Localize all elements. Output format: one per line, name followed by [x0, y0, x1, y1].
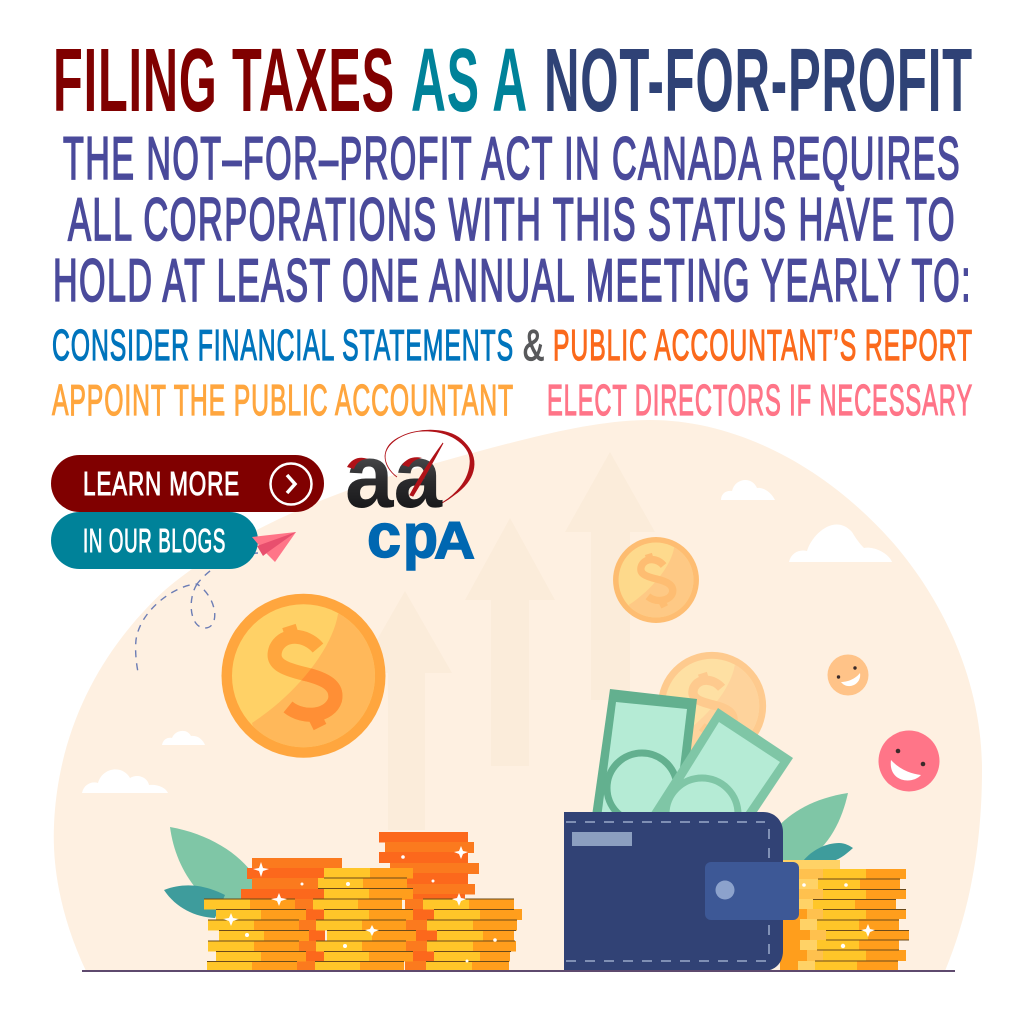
logo slash	[410, 443, 443, 496]
column 3	[423, 899, 522, 972]
requirement: appoint accountant: APPOINT THE PUBLIC ACCOUNTANT	[52, 376, 514, 425]
sparkles	[223, 846, 497, 962]
column 2	[313, 899, 416, 972]
orange stack back right	[379, 832, 479, 900]
ampersand: &	[523, 321, 545, 370]
wallet tag	[572, 832, 632, 846]
button label: IN OUR BLOGS	[83, 522, 226, 559]
coin: behind wallet	[658, 652, 766, 760]
title accent: AS A	[411, 31, 528, 131]
logo cpa: c	[367, 502, 401, 571]
filler orange between stacks	[295, 899, 438, 971]
button: in our blogs	[51, 512, 258, 569]
cloud top small	[721, 480, 775, 500]
yellow stack middle top	[318, 868, 413, 900]
cloud top large	[789, 524, 892, 562]
logo swoosh	[385, 430, 474, 505]
button label: LEARN MORE	[83, 465, 240, 502]
dashed flight path	[136, 553, 258, 672]
cloud left large	[82, 769, 168, 793]
logo accents	[347, 457, 422, 469]
coin: large	[222, 594, 386, 758]
coin stacks left	[204, 832, 522, 972]
arrow icon	[270, 464, 312, 504]
smiley: orange	[828, 654, 868, 696]
background blob	[54, 420, 982, 971]
icon: paper plane	[252, 532, 296, 562]
logo cpa: p	[403, 502, 438, 571]
arrow 3	[565, 452, 655, 700]
arrow 2	[465, 518, 555, 766]
clasp button	[716, 880, 734, 900]
wallet stitching	[566, 822, 769, 961]
wallet	[564, 812, 799, 971]
title: FILING TAXES	[53, 31, 395, 131]
growth arrows	[358, 452, 655, 830]
coin: upper	[613, 537, 699, 623]
logo: aa cpa	[345, 427, 475, 571]
logo cpa: A	[434, 512, 475, 570]
banknote: front	[640, 708, 793, 860]
arrow 1	[358, 591, 452, 830]
logo aa: aa	[345, 427, 443, 527]
cloud left small	[162, 731, 205, 745]
logo cpa	[367, 502, 475, 571]
coin stack right	[780, 860, 909, 971]
leaves right	[775, 793, 853, 862]
clouds	[82, 480, 892, 793]
orange stack back left	[241, 858, 342, 900]
banknote: back	[590, 689, 697, 840]
requirement: financial statements: CONSIDER FINANCIAL STATEMENTS	[52, 321, 514, 370]
wallet clasp	[705, 862, 799, 920]
coin edge lines	[204, 878, 517, 962]
column 1	[204, 899, 309, 972]
button: learn more	[51, 455, 324, 512]
ground line	[82, 970, 955, 972]
smiley: pink	[878, 730, 940, 792]
leaves left	[164, 827, 262, 920]
